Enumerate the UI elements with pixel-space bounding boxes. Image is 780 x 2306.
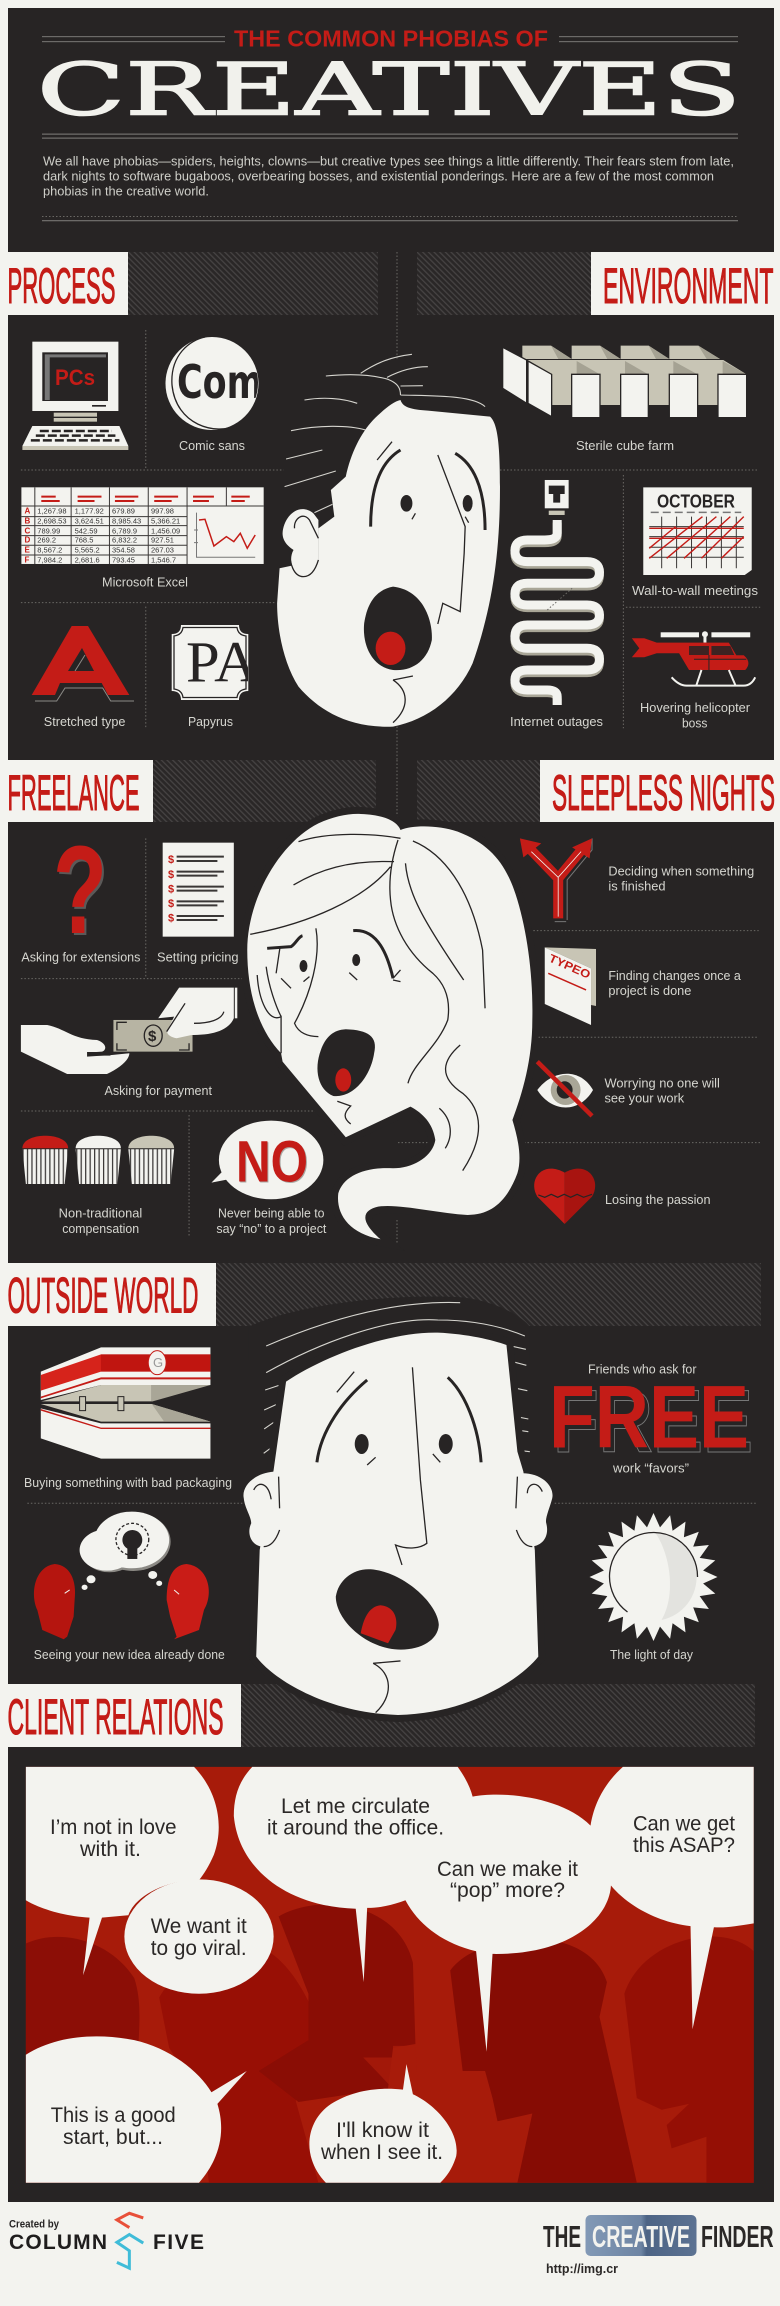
icon: stretched type (32, 626, 134, 701)
logo: the creative finder (543, 2215, 774, 2276)
icon: sun (590, 1513, 718, 1641)
intro text: dark nights to software bugaboos, overbearing bosses, and existential ponderings. Here are a few of the most common (43, 169, 714, 184)
chart: excel spreadsheet: 6,832.2 (112, 536, 137, 545)
icon: question mark: ? (53, 821, 107, 960)
label: deciding when finished (608, 864, 754, 894)
chart: excel spreadsheet: 1,456.09 (151, 526, 180, 535)
bubble text: pop more: “pop” more? (450, 1879, 565, 1902)
speech bubbles (26, 1767, 754, 2183)
label: non-traditional compensation (59, 1206, 142, 1236)
chart: excel spreadsheet: 927.51 (151, 536, 174, 545)
section headers row 1 (0, 252, 780, 360)
icon: hands and money (21, 988, 237, 1074)
chart: excel spreadsheet: F (24, 555, 30, 564)
label: non-traditional compensation: Non-traditional (59, 1206, 142, 1220)
section: client relations header (0, 1684, 755, 1747)
label: deciding when finished: Deciding when something (608, 864, 754, 878)
chart: excel spreadsheet: 2,681.6 (75, 555, 100, 564)
icon: cupcakes (22, 1136, 174, 1184)
label: helicopter: boss (682, 716, 707, 730)
chart: excel spreadsheet: 269.2 (37, 536, 56, 545)
bubble text: good start: This is a good (51, 2104, 176, 2127)
icon: price sheet (163, 843, 234, 937)
section headers row 1: PROCESS (8, 258, 116, 314)
illustration: panicked man front (243, 1296, 553, 1715)
chart: excel spreadsheet: 6,789.9 (112, 526, 137, 535)
title: creatives: CREATIVES (37, 48, 741, 132)
section: outside world header: OUTSIDE WORLD (8, 1268, 198, 1324)
icon: price sheet: $ (168, 884, 174, 896)
bubble text: know it: I'll know it (336, 2119, 429, 2142)
chart: excel spreadsheet: 5,366.21 (151, 516, 180, 525)
section: outside world header (0, 1263, 761, 1326)
chart: excel spreadsheet: 679.89 (112, 506, 135, 515)
chart: excel spreadsheet: E (24, 545, 30, 554)
panel: process and environment (21, 330, 760, 760)
icon: hands and money: $ (148, 1028, 157, 1045)
label: helicopter (640, 701, 750, 730)
label: cube farm: Sterile cube farm (576, 439, 674, 453)
label: helicopter: Hovering helicopter (640, 701, 750, 715)
illustration: panicked woman head (247, 814, 532, 1239)
chart: excel spreadsheet: 7,984.2 (37, 555, 62, 564)
label: finding changes (608, 969, 741, 998)
icon: typeo booklet: TYPEO (547, 953, 592, 982)
icon: helicopter (632, 631, 755, 686)
label: never say no: Never being able to (218, 1206, 325, 1220)
bubble text: asap (633, 1813, 735, 1857)
chart: excel spreadsheet: A (24, 506, 30, 515)
chart: excel spreadsheet: 354.58 (112, 545, 135, 554)
icon: typeo booklet (545, 947, 596, 1025)
chart: excel spreadsheet: 793.45 (112, 555, 135, 564)
chart: excel spreadsheet: 1,267.98 (37, 506, 67, 515)
logo: the creative finder: CREATIVE (592, 2219, 690, 2254)
section: client relations header: CLIENT RELATIONS (8, 1689, 224, 1745)
label: bad packaging: Buying something with bad packaging (24, 1476, 232, 1490)
callout: free work favors: work “favors” (612, 1462, 689, 1476)
intro text (43, 154, 734, 199)
icon: fork arrow (520, 838, 592, 922)
icon: stolen idea heads (34, 1512, 209, 1639)
illustration: panicked man head (277, 354, 500, 727)
callout: free work favors: Friends who ask for (588, 1362, 696, 1376)
icon: calendar (643, 487, 752, 575)
logo: column five (9, 2213, 204, 2268)
label: meetings: Wall-to-wall meetings (632, 584, 758, 598)
bubble text: asap: this ASAP? (633, 1834, 735, 1857)
label: never say no (216, 1206, 327, 1236)
label: papyrus: Papyrus (188, 715, 233, 729)
logo: column five: COLUMN (9, 2231, 107, 2254)
heading: process (0, 252, 128, 315)
label: asking for payment: Asking for payment (104, 1084, 213, 1098)
icon: broken heart (534, 1169, 595, 1224)
chart: excel spreadsheet: 789.99 (37, 526, 60, 535)
bubble text: pop more: Can we make it (437, 1858, 578, 1881)
logo: column five: Created by (9, 2219, 60, 2231)
label: non-traditional compensation: compensation (62, 1222, 139, 1236)
bubble text: not in love (50, 1816, 177, 1861)
label: comic sans: Comic sans (179, 439, 245, 453)
illustration: red silhouettes (26, 1767, 754, 2183)
bubble text: not in love: with it. (79, 1838, 141, 1861)
chart: excel spreadsheet: C (24, 526, 30, 535)
icon: price sheet: $ (168, 869, 174, 881)
panel: freelance and sleepless nights (21, 814, 760, 1243)
label: finding changes: project is done (608, 984, 691, 998)
logo: the creative finder: THE (543, 2219, 581, 2254)
bubble text: good start: start, but... (63, 2126, 163, 2149)
header (37, 26, 741, 221)
section headers row 2 (0, 760, 780, 825)
chart: excel spreadsheet: 997.98 (151, 506, 174, 515)
icon: crossed eye (537, 1062, 593, 1116)
label: excel: Microsoft Excel (102, 576, 188, 590)
chart: excel spreadsheet (21, 487, 264, 564)
label: worrying: see your work (604, 1092, 685, 1106)
intro text: We all have phobias—spiders, heights, clowns—but creative types see things a little differently. Their fears stem from late, (43, 154, 734, 169)
bubble text: good start (51, 2104, 176, 2149)
icon: computer: PCs (55, 365, 95, 390)
icon: comic sans: Com (177, 355, 263, 409)
icon: computer (22, 342, 128, 450)
icon: no bubble (211, 1121, 323, 1199)
bubble text: circulate: it around the office. (267, 1816, 444, 1840)
intro text: phobias in the creative world. (43, 184, 209, 199)
chart: excel spreadsheet: 267.03 (151, 545, 174, 554)
callout: free work favors: FREE (549, 1367, 749, 1467)
icon: comic sans (166, 337, 263, 430)
icon: price sheet: $ (168, 854, 174, 866)
label: light of day: The light of day (610, 1648, 694, 1662)
chart: excel spreadsheet: 8,985.43 (112, 516, 141, 525)
label: asking for extensions: Asking for extensions (21, 950, 140, 964)
label: worrying: Worrying no one will (604, 1076, 720, 1090)
bubble text: asap: Can we get (633, 1813, 735, 1836)
chart: excel spreadsheet: 542.59 (75, 526, 98, 535)
bubble text: know it (320, 2119, 443, 2164)
heading: client relations (0, 1684, 241, 1747)
bubble text: go viral (151, 1915, 247, 1960)
bubble text: pop more (437, 1858, 578, 1902)
panel: client relations (26, 1767, 754, 2183)
icon: papyrus: PA (186, 630, 258, 695)
icon: bad packaging: G (153, 1355, 163, 1370)
logo: column five: FIVE (153, 2231, 204, 2254)
bubble text: go viral: to go viral. (151, 1937, 247, 1960)
label: deciding when finished: is finished (608, 880, 666, 894)
bubble text: not in love: I’m not in love (50, 1816, 177, 1839)
icon: calendar: OCTOBER (657, 491, 735, 511)
chart: excel spreadsheet: B (24, 516, 30, 525)
panel: outside world (24, 1296, 756, 1715)
heading: freelance (0, 760, 153, 822)
bubble text: circulate: Let me circulate (281, 1795, 430, 1818)
bubble text: know it: when I see it. (320, 2141, 443, 2164)
icon: papyrus (172, 625, 248, 700)
label: internet outages: Internet outages (510, 715, 603, 729)
label: new idea already done: Seeing your new idea already done (34, 1648, 225, 1662)
chart: excel spreadsheet: 3,624.51 (75, 516, 104, 525)
icon: bad packaging (41, 1347, 210, 1459)
chart: excel spreadsheet: 1,546.7 (151, 555, 176, 564)
chart: excel spreadsheet: D (24, 536, 30, 545)
chart: excel spreadsheet: 768.5 (75, 536, 93, 545)
label: worrying (604, 1076, 720, 1106)
bubble text: circulate (267, 1795, 444, 1840)
label: setting pricing: Setting pricing (157, 950, 239, 964)
icon: no bubble: NO (236, 1130, 308, 1195)
icon: price sheet: $ (168, 913, 174, 925)
chart: excel spreadsheet: 5,565.2 (75, 545, 100, 554)
title: the common phobias of: THE COMMON PHOBIAS OF (234, 26, 548, 52)
footer (9, 2213, 774, 2276)
chart: excel spreadsheet: 8,567.2 (37, 545, 62, 554)
label: finding changes: Finding changes once a (608, 969, 741, 983)
bubble text: go viral: We want it (151, 1915, 247, 1938)
icon: cube farm (503, 346, 747, 418)
label: stretched type: Stretched type (44, 715, 125, 729)
section headers row 2: FREELANCE (8, 765, 140, 821)
chart: excel spreadsheet: 2,698.53 (37, 516, 67, 525)
icon: internet cable (515, 480, 599, 705)
logo: the creative finder: http://img.cr (546, 2262, 618, 2276)
chart: excel spreadsheet: 1,177.92 (75, 506, 104, 515)
label: never say no: say “no” to a project (216, 1222, 327, 1236)
label: losing the passion: Losing the passion (605, 1193, 711, 1207)
heading: outside world (0, 1263, 216, 1326)
icon: price sheet: $ (168, 898, 174, 910)
